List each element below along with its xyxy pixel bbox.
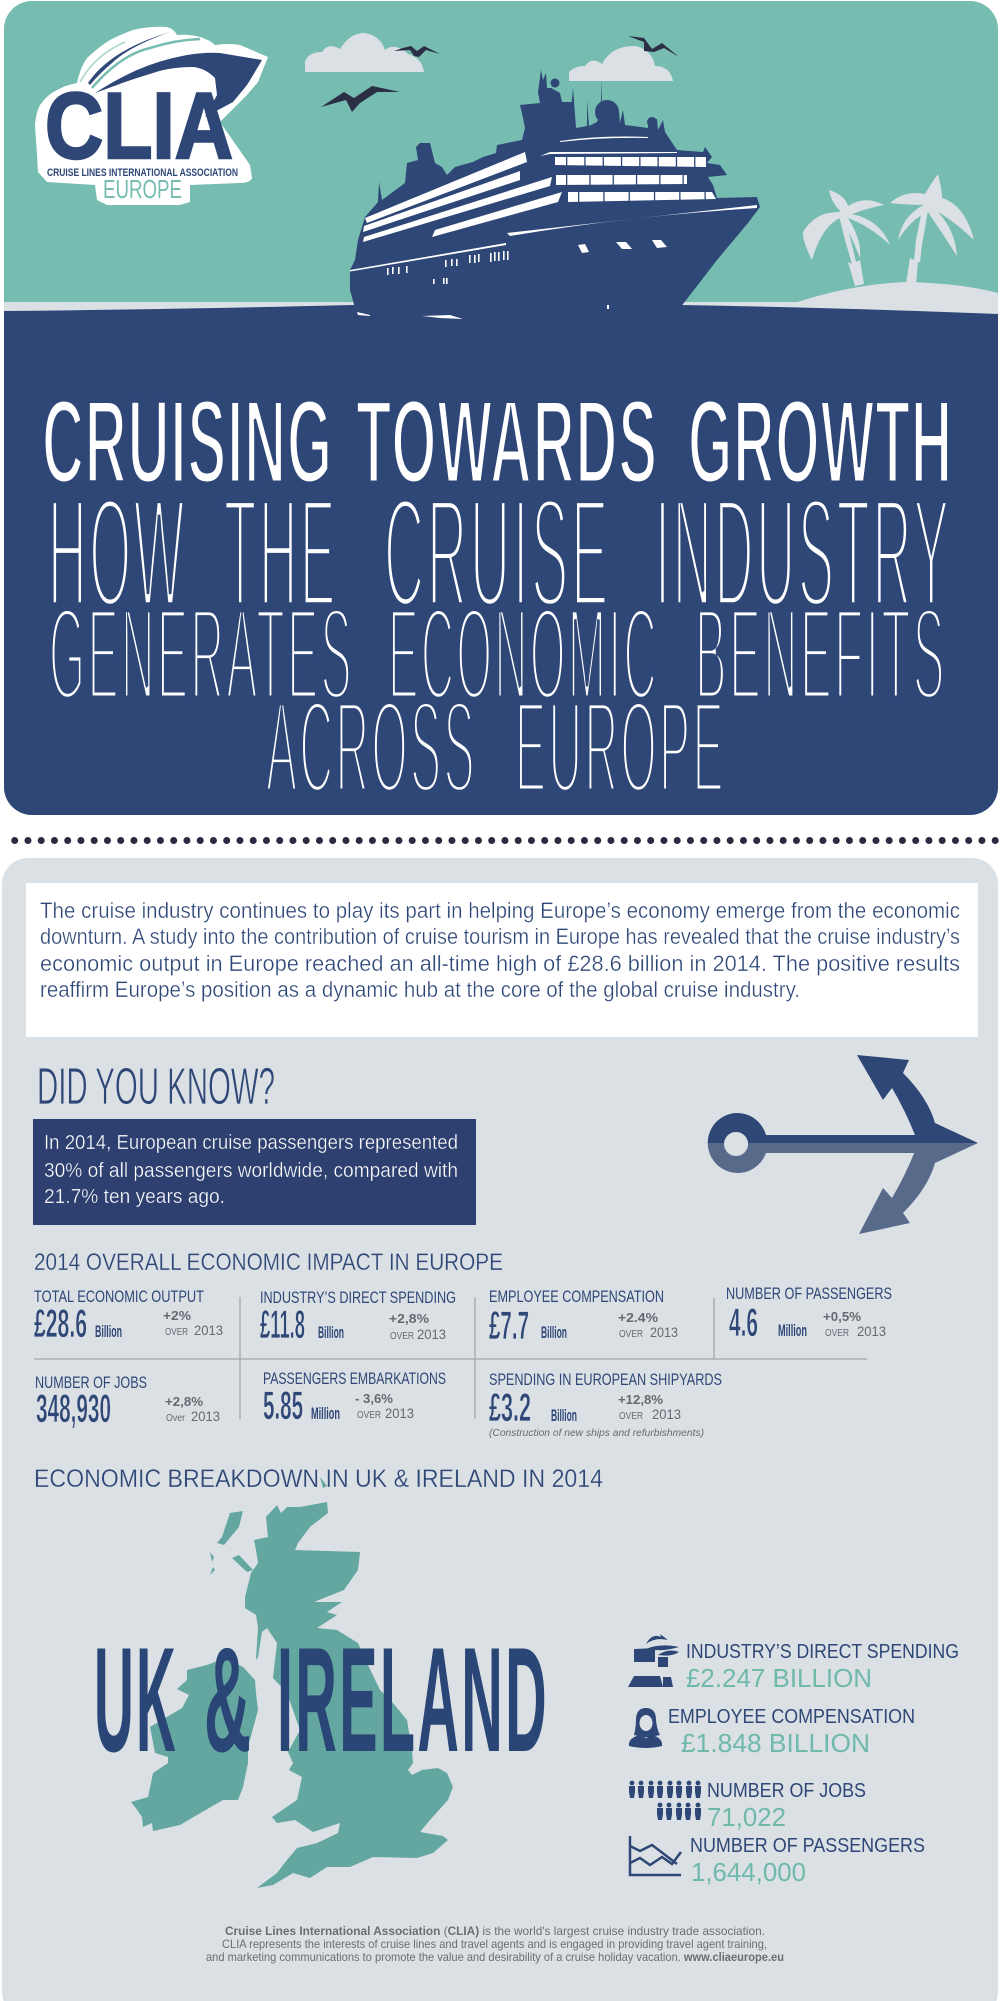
metric: industry's direct spending: £2.247 BILLION bbox=[686, 1663, 872, 1693]
icon: people bbox=[629, 1781, 701, 1820]
title: CRUISING bbox=[42, 375, 333, 509]
stat: spending in european shipyards: Billion bbox=[551, 1406, 577, 1425]
intro text block: The cruise industry continues to play its part in helping Europe’s economy emerge from the economic bbox=[40, 898, 960, 923]
cruise ship bbox=[350, 70, 760, 319]
callout: passengers share: 30% of all passengers worldwide, compared with bbox=[44, 1160, 458, 1182]
logo: CLIA Europe: EUROPE bbox=[103, 174, 182, 204]
logo: CLIA Europe bbox=[35, 27, 268, 205]
title: CRUISE bbox=[384, 466, 611, 639]
icon: ship funnels bbox=[628, 1634, 679, 1687]
table grid lines bbox=[34, 1297, 867, 1419]
callout: passengers share: In 2014, European cruise passengers represented bbox=[44, 1132, 458, 1154]
stat: passengers embarkations: OVER bbox=[357, 1410, 381, 1421]
stat: employee compensation: +2.4% bbox=[618, 1311, 658, 1325]
stat: industry's direct spending bbox=[260, 1288, 456, 1347]
stat: spending in european shipyards: +12,8% bbox=[618, 1393, 663, 1407]
icon: anchor bbox=[708, 1055, 978, 1234]
stat: passengers embarkations: - 3,6% bbox=[355, 1392, 393, 1406]
stat: spending in european shipyards: (Construction of new ships and refurbishments) bbox=[489, 1427, 704, 1439]
stat: number of jobs: 348,930 bbox=[36, 1387, 111, 1431]
stat: employee compensation bbox=[489, 1287, 678, 1348]
heading: overall economic impact: 2014 OVERALL ECONOMIC IMPACT IN EUROPE bbox=[34, 1249, 503, 1276]
island bbox=[798, 282, 998, 302]
footer text: Cruise Lines International Association (CLIA) is the world's largest cruise industry trade association. bbox=[225, 1924, 765, 1938]
title: HOW bbox=[48, 466, 187, 639]
stat: total economic output bbox=[34, 1287, 223, 1346]
callout: passengers share bbox=[33, 1119, 476, 1225]
panel: content background bbox=[2, 858, 998, 2001]
stat: passengers embarkations bbox=[263, 1369, 446, 1428]
stat: employee compensation: Billion bbox=[541, 1323, 567, 1342]
icon: line chart bbox=[630, 1836, 681, 1875]
stat: number of passengers bbox=[726, 1284, 892, 1345]
stat: number of jobs bbox=[35, 1373, 220, 1431]
stat: number of passengers: 4.6 bbox=[729, 1301, 758, 1345]
stat: total economic output: £28.6 bbox=[34, 1302, 87, 1346]
metric: industry's direct spending: INDUSTRY’S DIRECT SPENDING bbox=[686, 1640, 959, 1663]
stat: spending in european shipyards: £3.2 bbox=[489, 1386, 531, 1430]
stat: number of passengers: NUMBER OF PASSENGERS bbox=[726, 1284, 892, 1303]
map title: UK and Ireland: & bbox=[204, 1616, 251, 1783]
stat: number of passengers: Million bbox=[778, 1321, 807, 1340]
clouds bbox=[305, 33, 673, 81]
stat: industry's direct spending: Billion bbox=[318, 1323, 344, 1342]
metric: employee compensation bbox=[629, 1705, 915, 1758]
map title: UK and Ireland: UK bbox=[94, 1616, 178, 1783]
stat: industry's direct spending: OVER bbox=[390, 1331, 414, 1342]
stat: number of jobs: +2,8% bbox=[165, 1395, 203, 1409]
stat: passengers embarkations: 5.85 bbox=[263, 1384, 303, 1428]
icon: woman bbox=[629, 1708, 662, 1748]
stat: total economic output: +2% bbox=[163, 1309, 191, 1323]
stat: industry's direct spending: 2013 bbox=[417, 1326, 446, 1342]
title bbox=[46, 402, 947, 790]
metric: number of jobs bbox=[629, 1779, 866, 1832]
stat: number of jobs: 2013 bbox=[191, 1408, 220, 1424]
stat: passengers embarkations: Million bbox=[311, 1404, 340, 1423]
stat: total economic output: 2013 bbox=[194, 1322, 223, 1338]
panel: hero banner bbox=[4, 1, 998, 820]
metric: number of passengers: 1,644,000 bbox=[691, 1857, 806, 1887]
stat: industry's direct spending: £11.8 bbox=[260, 1303, 305, 1347]
heading: did you know: DID YOU KNOW? bbox=[37, 1058, 275, 1116]
title: GENERATES bbox=[49, 580, 354, 727]
stat: employee compensation: 2013 bbox=[650, 1324, 678, 1340]
stat: number of passengers: 2013 bbox=[857, 1323, 886, 1339]
metric: industry's direct spending bbox=[628, 1634, 959, 1693]
stat: employee compensation: OVER bbox=[619, 1329, 643, 1340]
stat: passengers embarkations: PASSENGERS EMBARKATIONS bbox=[263, 1369, 446, 1388]
stat: spending in european shipyards: SPENDING IN EUROPEAN SHIPYARDS bbox=[489, 1370, 722, 1389]
stat: number of jobs: NUMBER OF JOBS bbox=[35, 1373, 147, 1392]
stat: industry's direct spending: +2,8% bbox=[389, 1312, 429, 1326]
intro text block: economic output in Europe reached an all-time high of £28.6 billion in 2014. The positive results bbox=[40, 951, 960, 976]
stat: total economic output: OVER bbox=[165, 1327, 188, 1338]
stat: employee compensation: £7.7 bbox=[489, 1304, 529, 1348]
horizon strip bbox=[4, 302, 798, 311]
text: IRELAND bbox=[277, 1616, 549, 1783]
stat: spending in european shipyards: 2013 bbox=[652, 1406, 681, 1422]
callout: passengers share: 21.7% ten years ago. bbox=[44, 1186, 225, 1208]
title: ACROSS bbox=[266, 673, 477, 820]
intro text block bbox=[26, 883, 978, 1037]
metric: number of jobs: 71,022 bbox=[707, 1802, 786, 1832]
palm trees bbox=[803, 174, 974, 286]
birds bbox=[321, 36, 679, 112]
stat: spending in european shipyards: OVER bbox=[619, 1411, 643, 1422]
stat: number of passengers: OVER bbox=[825, 1328, 849, 1339]
metric: number of jobs: NUMBER OF JOBS bbox=[707, 1779, 866, 1802]
stat: total economic output: TOTAL ECONOMIC OUTPUT bbox=[34, 1287, 204, 1306]
title: THE bbox=[224, 466, 338, 639]
footer text: CLIA represents the interests of cruise lines and travel agents and is engaged in providing travel agent training, bbox=[222, 1937, 767, 1951]
intro text block: reaffirm Europe’s position as a dynamic hub at the core of the global cruise industry. bbox=[40, 977, 800, 1002]
title: TOWARDS bbox=[356, 375, 658, 509]
metric: employee compensation: EMPLOYEE COMPENSATION bbox=[668, 1705, 915, 1728]
metric: number of passengers bbox=[630, 1834, 925, 1887]
map: UK and Ireland bbox=[131, 1477, 453, 1888]
footer text: and marketing communications to promote the value and desirability of a cruise holiday vacation. www.cliaeurope.eu bbox=[206, 1950, 784, 1964]
stat: total economic output: Billion bbox=[95, 1322, 122, 1341]
metric: employee compensation: £1.848 BILLION bbox=[681, 1728, 870, 1758]
logo: CLIA Europe: CLIA bbox=[45, 73, 233, 178]
map title: UK and Ireland bbox=[94, 1616, 549, 1783]
heading: economic breakdown: ECONOMIC BREAKDOWN IN UK & IRELAND IN 2014 bbox=[34, 1465, 603, 1493]
stat: spending in european shipyards bbox=[489, 1370, 722, 1439]
stat: passengers embarkations: 2013 bbox=[385, 1405, 414, 1421]
stat: employee compensation: EMPLOYEE COMPENSATION bbox=[489, 1287, 664, 1306]
stat: number of passengers: +0,5% bbox=[823, 1310, 861, 1324]
stat: industry's direct spending: INDUSTRY’S DIRECT SPENDING bbox=[260, 1288, 456, 1307]
footer text bbox=[206, 1924, 784, 1964]
metric: number of passengers: NUMBER OF PASSENGERS bbox=[690, 1834, 925, 1857]
logo: CLIA Europe: CRUISE LINES INTERNATIONAL ASSOCIATION bbox=[47, 167, 238, 179]
sea bbox=[4, 305, 998, 815]
stat: number of jobs: Over bbox=[166, 1413, 186, 1424]
